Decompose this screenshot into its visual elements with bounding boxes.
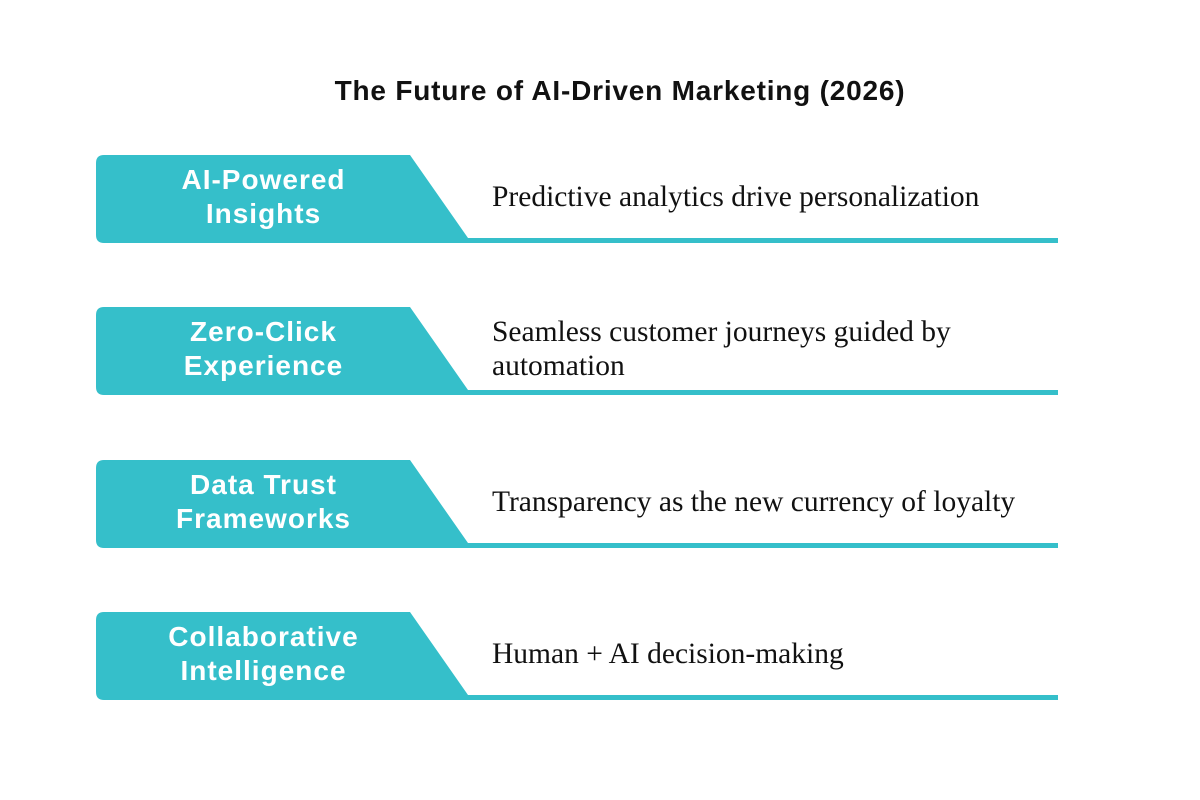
tab shape [96, 155, 1058, 243]
description [492, 316, 951, 382]
description: Predictive analytics drive personalization [492, 180, 979, 212]
label: Intelligence [180, 654, 347, 686]
label [181, 164, 346, 229]
label: Insights [206, 198, 321, 228]
tab shape [96, 307, 1058, 395]
tab shape [96, 460, 1058, 548]
label: Experience [184, 350, 343, 380]
row: Collaborative Intelligence [96, 612, 1058, 700]
label: Frameworks [176, 502, 351, 534]
row: Zero-Click Experience [96, 307, 1058, 395]
description: Transparency as the new currency of loyalty [492, 486, 1015, 518]
description: Human + AI decision-making [492, 638, 844, 670]
row: Data Trust Frameworks [96, 460, 1058, 548]
label: AI-Powered [181, 164, 346, 194]
label [176, 468, 351, 534]
label [184, 316, 343, 381]
label: Data Trust [190, 468, 337, 500]
label: Zero-Click [190, 316, 337, 346]
description: automation [492, 350, 625, 382]
title: The Future of AI-Driven Marketing (2026) [335, 75, 905, 106]
label [168, 620, 359, 686]
label: Collaborative [168, 620, 359, 652]
row: AI-Powered Insights [96, 155, 1058, 243]
tab shape [96, 612, 1058, 700]
description: Seamless customer journeys guided by [492, 316, 951, 348]
